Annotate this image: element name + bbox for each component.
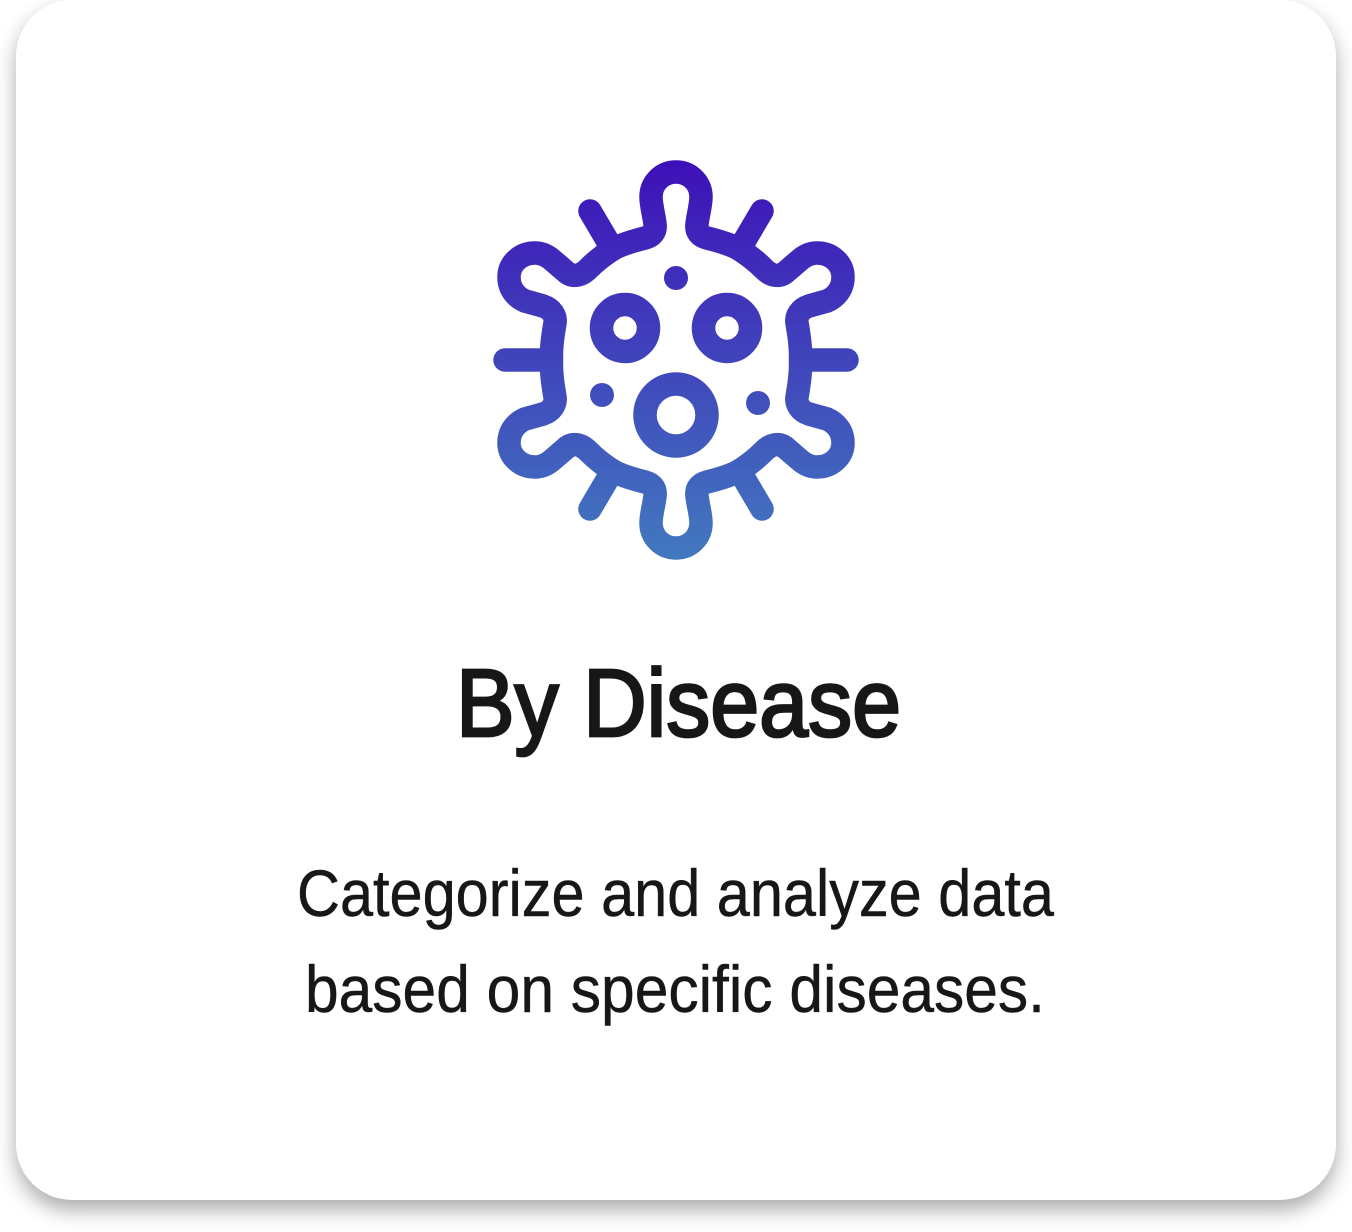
- icon: virus: [505, 172, 847, 548]
- text block: description: [297, 856, 1054, 1026]
- text block: description: Categorize and analyze data: [297, 856, 1054, 930]
- heading: By Disease: [456, 650, 901, 757]
- text block: description: based on specific diseases.: [305, 952, 1045, 1026]
